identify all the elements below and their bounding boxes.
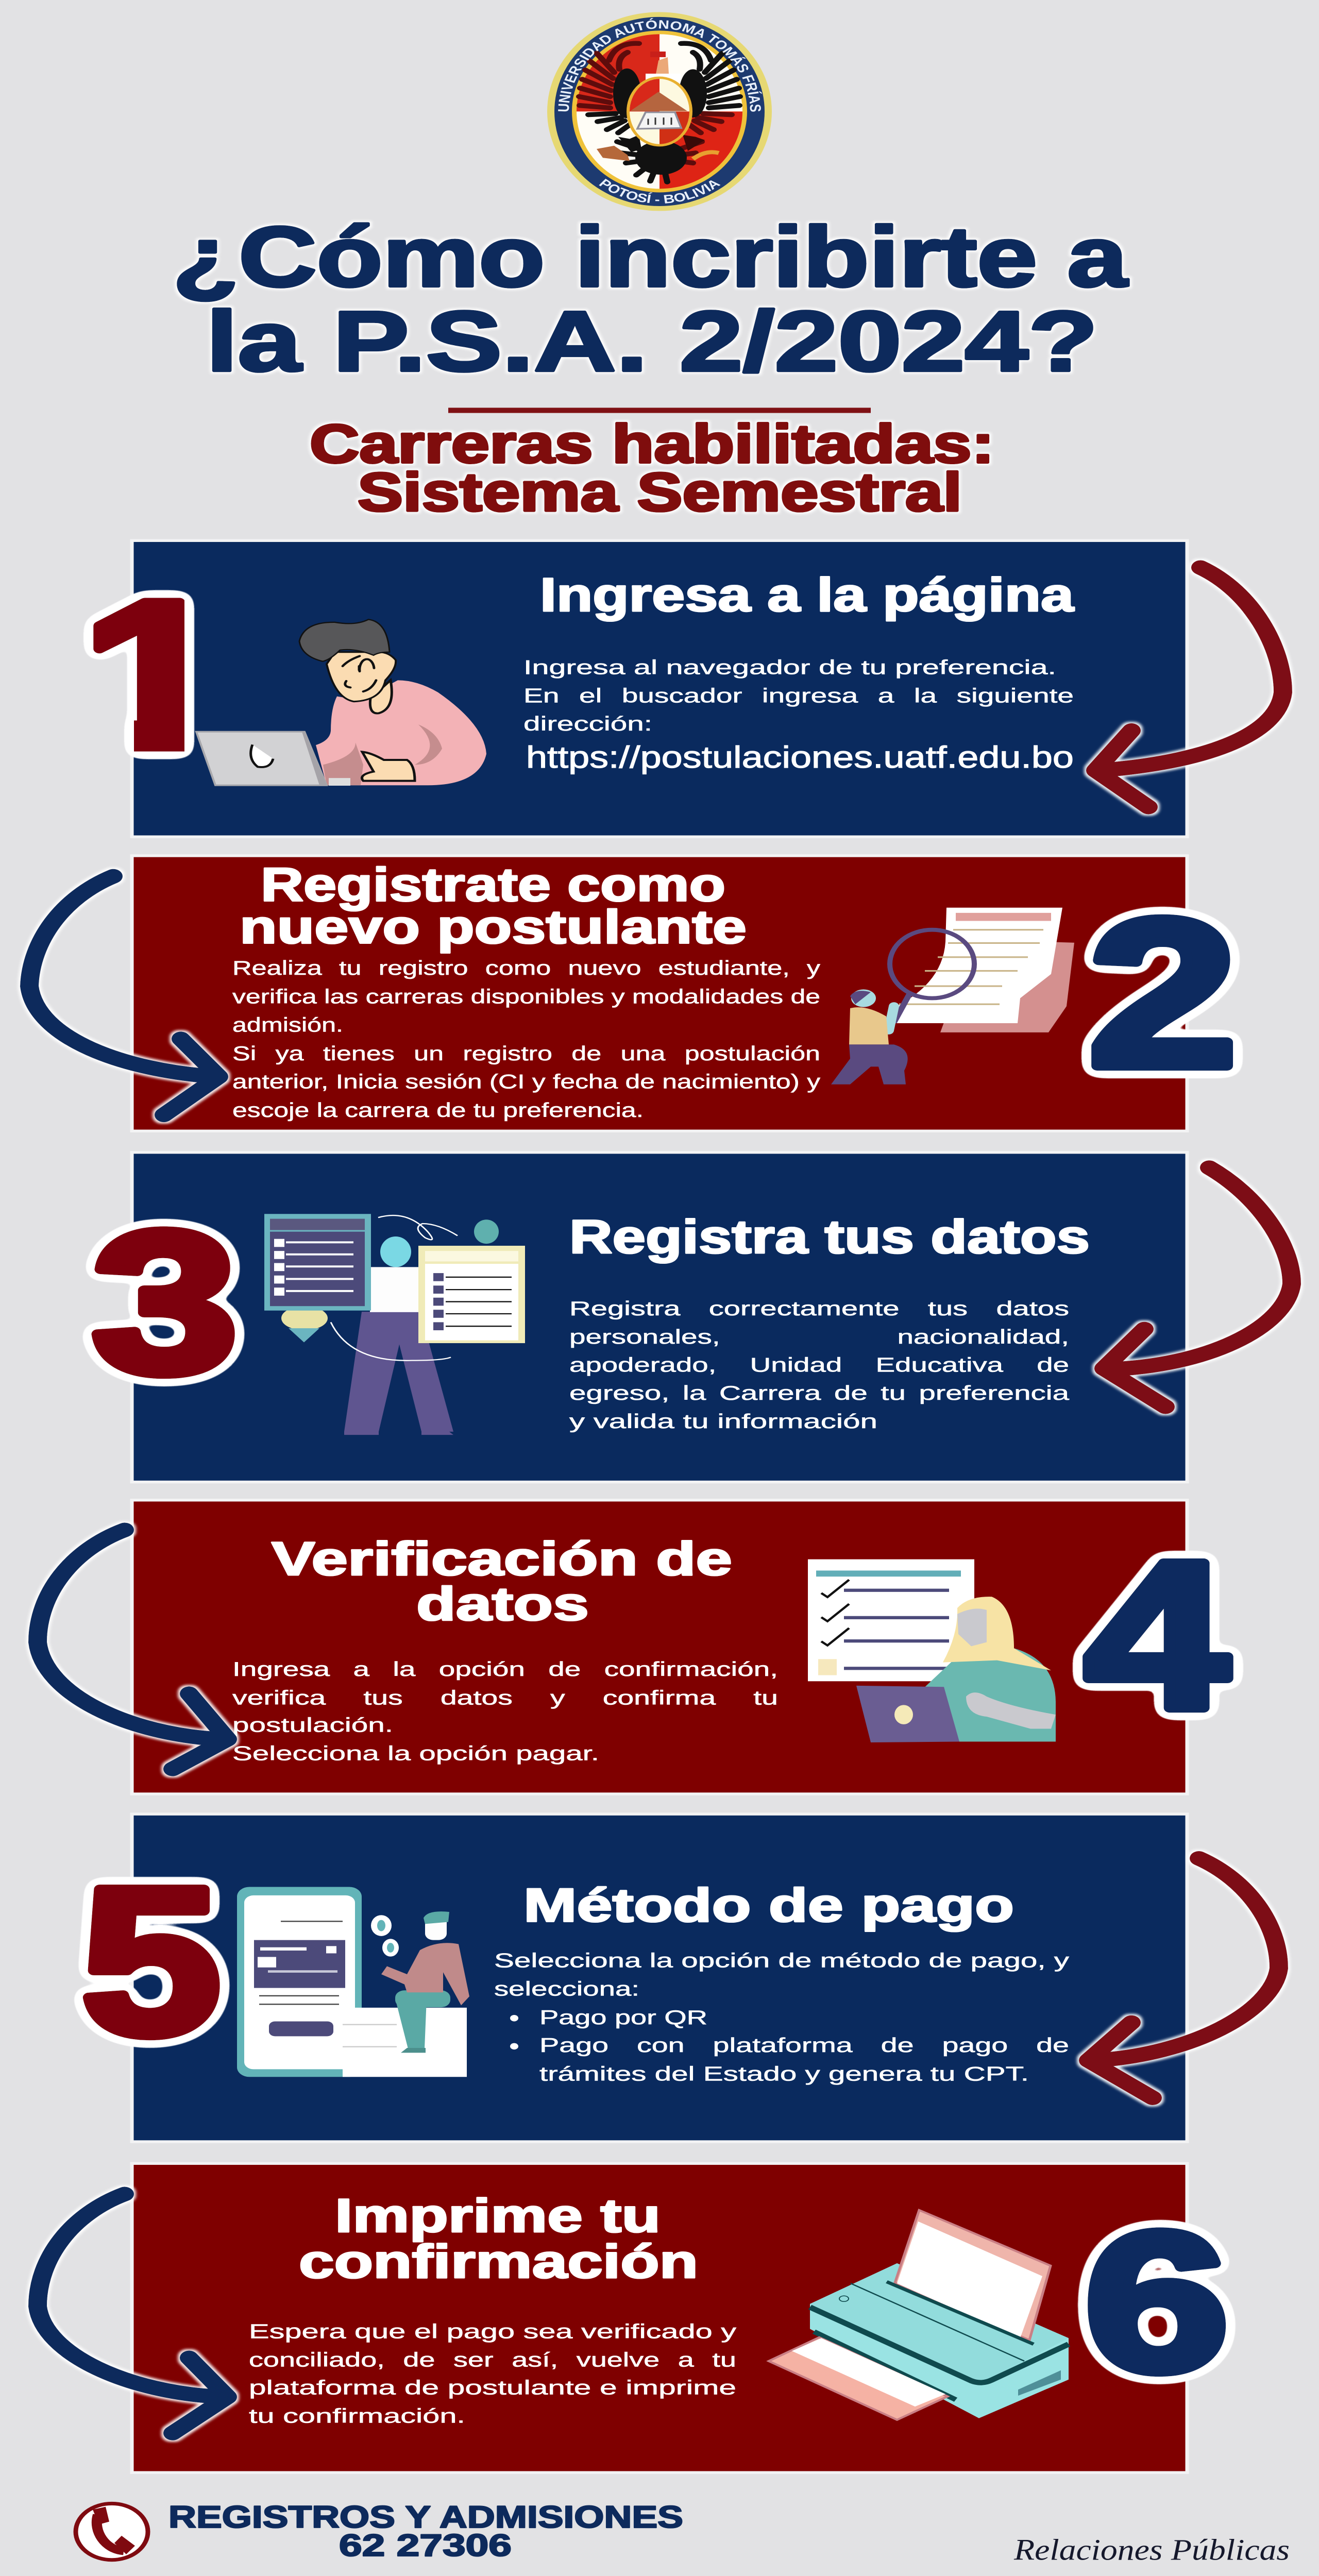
step 2 body text: admisión. [232, 1013, 343, 1036]
step 6 heading [299, 2189, 698, 2288]
panel: step 3 [132, 1153, 1187, 1482]
step 5 body text: selecciona: [494, 1977, 639, 2000]
step 4 heading: datos [416, 1578, 589, 1631]
step 2 body text: Si ya tienes un registro de una postulación [232, 1042, 820, 1065]
arrow: step 5 to step 6 [1088, 1858, 1279, 2098]
step 2 body text: escoje la carrera de tu preferencia. [232, 1098, 644, 1122]
icon: printer [769, 2210, 1069, 2420]
contact text [168, 2499, 683, 2563]
step 1 body text: Ingresa al navegador de tu preferencia. [523, 656, 1056, 679]
number 1: 1 [81, 557, 228, 791]
ring text: UNIVERSIDAD AUTÓNOMA TOMÁS FRÍAS [558, 18, 762, 112]
step 2 heading [240, 858, 747, 953]
step 6 heading: confirmación [299, 2235, 698, 2288]
contact text: 62 27306 [339, 2528, 512, 2563]
arrow: step 4 to step 5 [38, 1530, 228, 1769]
divider rule [448, 408, 871, 413]
step 1 body text [523, 656, 1074, 735]
arrow: step 1 to step 2 [1095, 568, 1283, 807]
step 2 heading: nuevo postulante [240, 901, 747, 953]
number 5: 5 [81, 1844, 221, 2078]
icon: person with laptop [196, 619, 486, 786]
step 2 heading: Registrate como [261, 858, 725, 911]
step 3 body text: egreso, la Carrera de tu preferencia [569, 1381, 1069, 1404]
step 3 heading: Registra tus datos [569, 1210, 1090, 1263]
panel: step 5 [132, 1814, 1187, 2142]
number 2: 2 [1088, 876, 1238, 1111]
panel: step 2 [132, 856, 1187, 1131]
fist [655, 57, 669, 76]
number 3: 3 [92, 1190, 238, 1415]
number 4: 4 [1085, 1518, 1230, 1753]
panel: step 6 [132, 2163, 1187, 2472]
subtitle [310, 413, 994, 522]
number 6: 6 [1085, 2192, 1229, 2412]
step 1 URL: https://postulaciones.uatf.edu.bo [526, 740, 1074, 774]
step 2 body text: Realiza tu registro como nuevo estudiante, y [232, 956, 821, 979]
step 3 body text: y valida tu información [569, 1410, 877, 1433]
step 1 heading: Ingresa a la página [540, 568, 1074, 621]
step 3 body text [569, 1297, 1069, 1433]
panel: step 4 [132, 1500, 1187, 1794]
step 4 body text: Selecciona la opción pagar. [232, 1742, 599, 1765]
step 3 body text: apoderado, Unidad Educativa de [569, 1353, 1069, 1376]
step 6 body text: Espera que el pago sea verificado y [249, 2320, 737, 2343]
arrow: step 3 to step 4 [1104, 1167, 1292, 1406]
step 1 body text: dirección: [523, 712, 652, 735]
step 4 body text: postulación. [232, 1714, 393, 1736]
bullet list: Pago con plataforma de pago de [539, 2033, 1069, 2057]
step 1 body text: En el buscador ingresa a la siguiente [523, 684, 1074, 707]
step 4 body text [232, 1657, 778, 1765]
icon: phone payment with man [237, 1887, 469, 2077]
icon: telephone [76, 2503, 148, 2560]
contact text: REGISTROS Y ADMISIONES [168, 2499, 683, 2534]
step 4 heading: Verificación de [272, 1532, 732, 1585]
step 2 body text: anterior, Inicia sesión (CI y fecha de nacimiento) y [232, 1070, 821, 1093]
step 5 body text [494, 1949, 1070, 2085]
title: ¿Cómo incribirte a [173, 210, 1128, 304]
step 3 body text: Registra correctamente tus datos [569, 1297, 1069, 1320]
bullet list: Pago por QR [539, 2006, 707, 2029]
step 6 body text: plataforma de postulante e imprime [249, 2376, 736, 2399]
book [637, 112, 681, 129]
icon: person with magnifier and document [831, 908, 1074, 1084]
step 2 body text [232, 956, 821, 1122]
signature: Relaciones Públicas: Relaciones Públicas [1013, 2534, 1290, 2567]
bullet list: trámites del Estado y genera tu CPT. [539, 2062, 1029, 2085]
step 4 body text: verifica tus datos y confirma tu [232, 1686, 778, 1709]
step 6 body text: tu confirmación. [249, 2404, 465, 2427]
icon: woman checking a list [808, 1560, 1056, 1742]
shield [628, 78, 691, 145]
step 6 body text: conciliado, de ser así, vuelve a tu [249, 2348, 736, 2371]
logo: university seal [547, 12, 772, 211]
step 4 body text: Ingresa a la opción de confirmación, [232, 1657, 778, 1681]
eagle bodies [613, 69, 641, 118]
step 6 body text [249, 2320, 737, 2427]
panel: step 1 [132, 540, 1187, 837]
title: la P.S.A. 2/2024? [206, 294, 1098, 389]
step 5 body text: Selecciona la opción de método de pago, y [494, 1949, 1070, 1972]
step 2 body text: verifica las carreras disponibles y modalidades de [232, 985, 820, 1008]
logo: university seal: POTOSÍ - BOLIVIA [599, 178, 720, 204]
step 6 heading: Imprime tu [335, 2189, 661, 2242]
bullet list [510, 2006, 1069, 2085]
step 3 body text: personales, nacionalidad, [569, 1325, 1069, 1348]
arrow: step 2 to step 3 [29, 876, 219, 1115]
subtitle: Sistema Semestral [358, 462, 962, 522]
title [173, 210, 1128, 389]
subtitle: Carreras habilitadas: [310, 413, 994, 474]
icon: person holding forms [264, 1214, 525, 1435]
step 5 heading: Método de pago [523, 1879, 1014, 1932]
step 4 heading [272, 1532, 732, 1631]
arrow: step 6 to end [38, 2194, 228, 2433]
